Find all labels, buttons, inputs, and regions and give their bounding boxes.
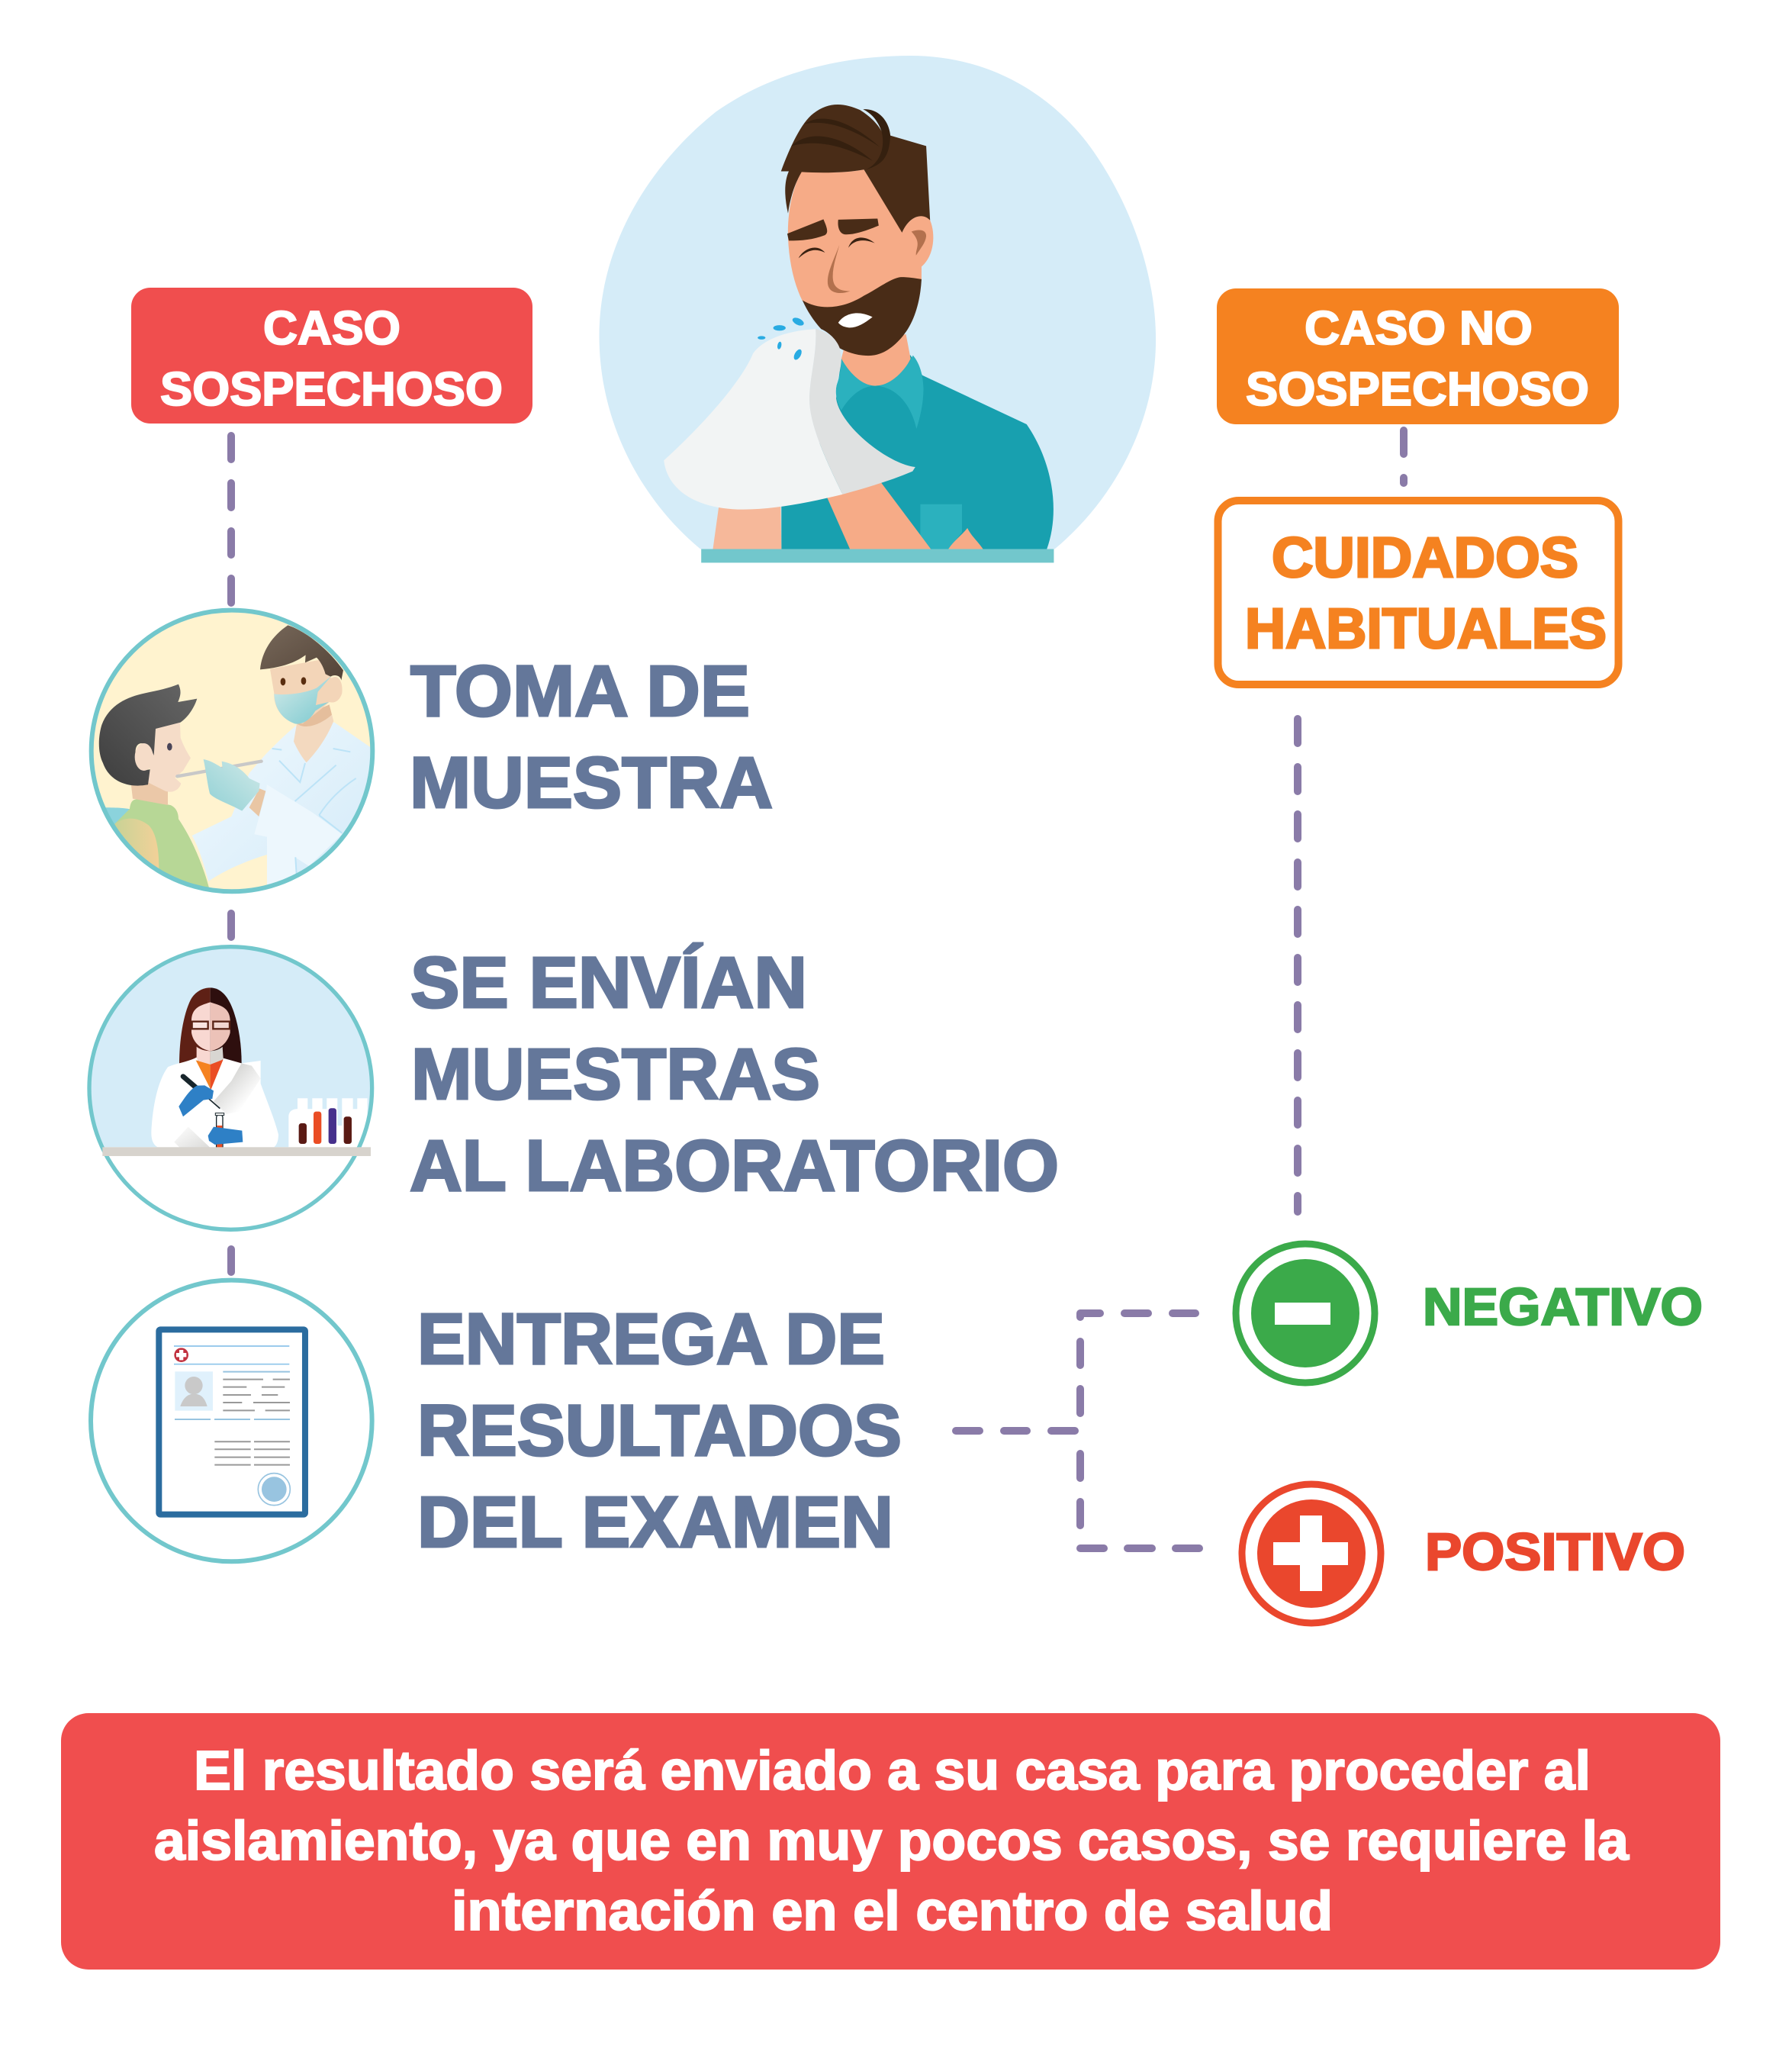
badge text [160, 302, 503, 416]
left forearm [713, 502, 781, 549]
badge text: SOSPECHOSO [160, 363, 503, 416]
box text: CUIDADOS [1272, 526, 1578, 589]
connector: resultados to negativo and positivo [956, 1313, 1199, 1548]
heading: entrega de resultados del examen: ENTREGA DE [417, 1299, 885, 1380]
hair [781, 105, 930, 233]
eyebrows [787, 218, 879, 240]
badge: caso no sospechoso [1217, 288, 1619, 424]
heading: entrega de resultados del examen [417, 1299, 902, 1563]
ear [899, 216, 933, 270]
badge text: CASO NO [1305, 302, 1533, 355]
tissue [664, 329, 842, 510]
right arm [827, 482, 931, 549]
label: negativo: NEGATIVO [1423, 1277, 1703, 1336]
illustration: sneezing man [600, 56, 1156, 562]
callout text: El resultado será enviado a su casa para proceder al [194, 1741, 1591, 1802]
heading: entrega de resultados del examen: RESULTADOS [417, 1390, 902, 1471]
light blue blob background [600, 56, 1156, 549]
badge text: SOSPECHOSO [1246, 363, 1589, 416]
face [788, 169, 922, 318]
callout text: internación en el centro de salud [452, 1881, 1333, 1942]
icon: negative result [1236, 1244, 1375, 1383]
mouth [838, 313, 873, 327]
step 2 illustration: laboratorio [89, 946, 372, 1229]
droplets [758, 316, 806, 361]
icon: positive result [1242, 1484, 1381, 1623]
collar [836, 356, 924, 429]
connector: caso no sospechoso to cuidados [1400, 430, 1408, 483]
badge text [1246, 302, 1589, 416]
closed eyes [799, 237, 875, 258]
shirt pocket [920, 504, 962, 549]
heading: toma de muestra [410, 651, 773, 823]
box text: HABITUALES [1245, 597, 1607, 660]
badge text: CASO [263, 302, 401, 355]
table bar [701, 549, 1054, 562]
heading: se envían muestras al laboratorio: AL LABORATORIO [410, 1126, 1059, 1206]
box text [1245, 526, 1607, 660]
tissue fold [809, 329, 915, 494]
step 3 illustration: resultados document [91, 1280, 372, 1561]
connector: caso sospechoso to steps [227, 436, 235, 1272]
heading: se envían muestras al laboratorio [410, 942, 1059, 1206]
step 1 illustration: toma de muestra [92, 610, 372, 891]
heading: se envían muestras al laboratorio: SE ENVÍAN [410, 942, 807, 1023]
label: positivo: POSITIVO [1425, 1522, 1685, 1581]
callout text: aislamiento, ya que en muy pocos casos, se requiere la [154, 1811, 1630, 1872]
inner ear [912, 230, 926, 256]
callout text [154, 1741, 1630, 1942]
shirt [781, 356, 1054, 549]
badge: caso sospechoso [131, 288, 532, 424]
connector: cuidados to negativo [1294, 719, 1301, 1212]
heading: se envían muestras al laboratorio: MUESTRAS [411, 1034, 820, 1115]
heading: toma de muestra: MUESTRA [410, 742, 773, 823]
box: cuidados habituales [1218, 501, 1619, 684]
neck [841, 334, 911, 386]
heading: entrega de resultados del examen: DEL EXAMEN [417, 1482, 893, 1563]
heading: toma de muestra: TOMA DE [410, 651, 750, 732]
callout: resultado [61, 1713, 1720, 1970]
hair strands [791, 109, 890, 169]
hand [948, 528, 983, 549]
nose [828, 245, 851, 293]
beard [803, 277, 922, 356]
